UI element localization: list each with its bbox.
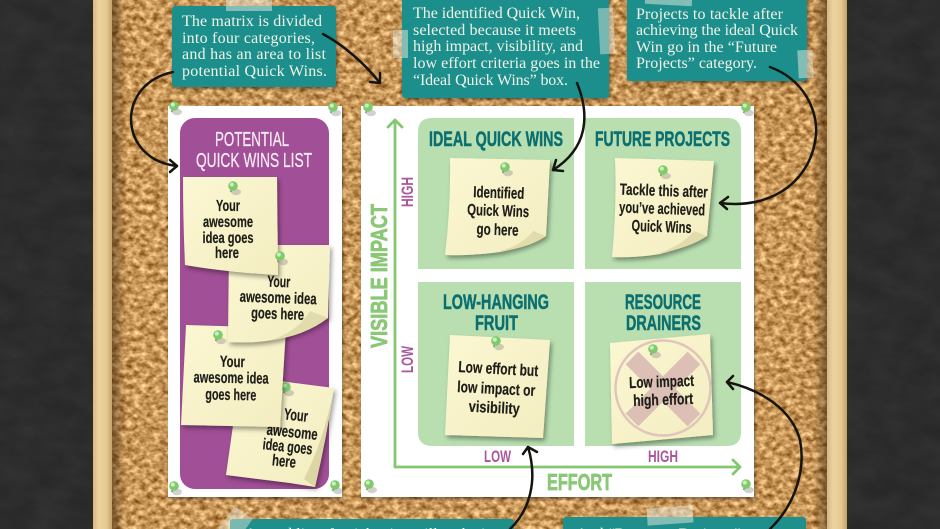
purple list area (180, 118, 329, 489)
sticky note: low impact or (457, 379, 536, 400)
sticky note (612, 158, 714, 257)
sticky note 4: idea goes (262, 436, 313, 458)
quadrant heading: LOW-HANGING (443, 291, 549, 314)
list heading: POTENTIAL (215, 129, 289, 151)
sticky note 3: Your (220, 354, 245, 371)
x axis label: low: LOW (484, 447, 512, 466)
quadrant heading: RESOURCE (625, 291, 701, 314)
sticky note 2: awesome idea (239, 289, 317, 308)
quadrant: resource drainers (585, 282, 741, 446)
sticky note (445, 335, 550, 438)
icon: crossed-out circle (616, 340, 710, 436)
y axis label: high: HIGH (398, 177, 417, 207)
quadrant heading (625, 291, 701, 335)
sticky note 1: awesome (203, 214, 253, 231)
arrow: to ideal quick wins (553, 83, 584, 171)
sticky note 3: goes here (205, 387, 257, 404)
sticky note 2: goes here (251, 305, 304, 324)
callout: identified quick win: low effort criteria goes in the (413, 55, 600, 72)
callout: identified quick win: high impact, visibility, and (413, 38, 583, 55)
sticky note: Low impact (629, 373, 695, 392)
pin on sticky note 2 (275, 251, 288, 265)
quadrant: low-hanging fruit (418, 282, 574, 446)
sticky note 1 (183, 177, 278, 275)
callout: identified quick win (393, 0, 615, 98)
sticky note: Quick Wins (631, 218, 692, 237)
sticky note 3: awesome idea (193, 369, 269, 388)
callout: future projects (627, 0, 814, 81)
quadrant heading: FRUIT (475, 312, 518, 335)
sticky note 3 (181, 325, 286, 427)
list heading (196, 129, 312, 172)
axes (388, 120, 740, 474)
callout: future projects: Win go in the “Future (636, 39, 777, 56)
callout: matrix overview: The matrix is divided (182, 13, 322, 30)
arrow: callout to list panel (131, 72, 177, 172)
quadrant: ideal quick wins (418, 118, 574, 269)
sticky note: visibility (468, 399, 520, 418)
callout: identified quick win: selected because it meets (413, 22, 576, 39)
arrow: to resource drainers (727, 376, 802, 529)
wooden frame: left rail (93, 0, 112, 529)
sticky note: Low effort but (458, 359, 539, 380)
callout: future projects: Projects to tackle after (636, 6, 784, 23)
panel corner pins (363, 102, 754, 493)
wooden frame: right rail (827, 0, 847, 529)
sticky note: go here (476, 221, 519, 240)
quadrant heading: FUTURE PROJECTS (595, 128, 730, 151)
sticky note: Tackle this after (620, 181, 708, 202)
panel: potential quick wins list (168, 101, 343, 497)
sticky note 1: Your (216, 198, 240, 215)
sticky note 2 (228, 245, 330, 342)
sticky note 4: here (271, 452, 297, 472)
sticky note (445, 158, 550, 255)
quadrant: future projects (585, 118, 741, 269)
quadrant heading: IDEAL QUICK WINS (429, 128, 563, 151)
callout: identified quick win: The identified Quick Win, (413, 5, 580, 22)
quadrant heading: DRAINERS (626, 312, 701, 335)
panel: quick wins matrix (361, 102, 754, 497)
sticky note 4: Your (283, 406, 309, 426)
sticky note 4 (226, 376, 334, 487)
sticky note (610, 334, 713, 444)
callout: matrix overview: into four categories, (182, 30, 315, 47)
quadrant heading (443, 291, 549, 335)
sticky note 1: idea goes (202, 230, 254, 247)
y axis label: low: LOW (398, 345, 417, 373)
arrow: to future projects (720, 67, 816, 209)
y axis title: VISIBLE IMPACT (366, 204, 392, 348)
sticky note: Identified (473, 184, 525, 203)
callout: identified quick win: “Ideal Quick Wins” box. (413, 72, 568, 89)
callout: future projects: achieving the ideal Quick (636, 22, 798, 39)
x axis title: EFFORT (547, 469, 612, 495)
sticky note: high effort (633, 391, 694, 410)
callout: resource drainers note (563, 505, 806, 529)
callout: matrix overview (172, 0, 336, 87)
callout: matrix overview: potential Quick Wins. (182, 63, 327, 80)
panel corner pins (169, 101, 343, 495)
callout: future projects: Projects” category. (636, 55, 757, 72)
callout: matrix overview: and has an area to list (182, 46, 327, 63)
sticky note 1: here (215, 245, 239, 262)
cork board (112, 0, 827, 529)
sticky note 4: awesome (266, 422, 318, 444)
sticky note 2: Your (267, 274, 291, 291)
sticky note: Quick Wins (467, 202, 530, 221)
arrow: callout to matrix (323, 34, 380, 83)
x axis label: high: HIGH (648, 447, 678, 466)
callout: low-hanging fruit note (217, 506, 514, 529)
list heading: QUICK WINS LIST (196, 150, 312, 172)
sticky note: you’ve achieved (619, 199, 705, 219)
arrow: to low-hanging fruit (510, 447, 537, 529)
